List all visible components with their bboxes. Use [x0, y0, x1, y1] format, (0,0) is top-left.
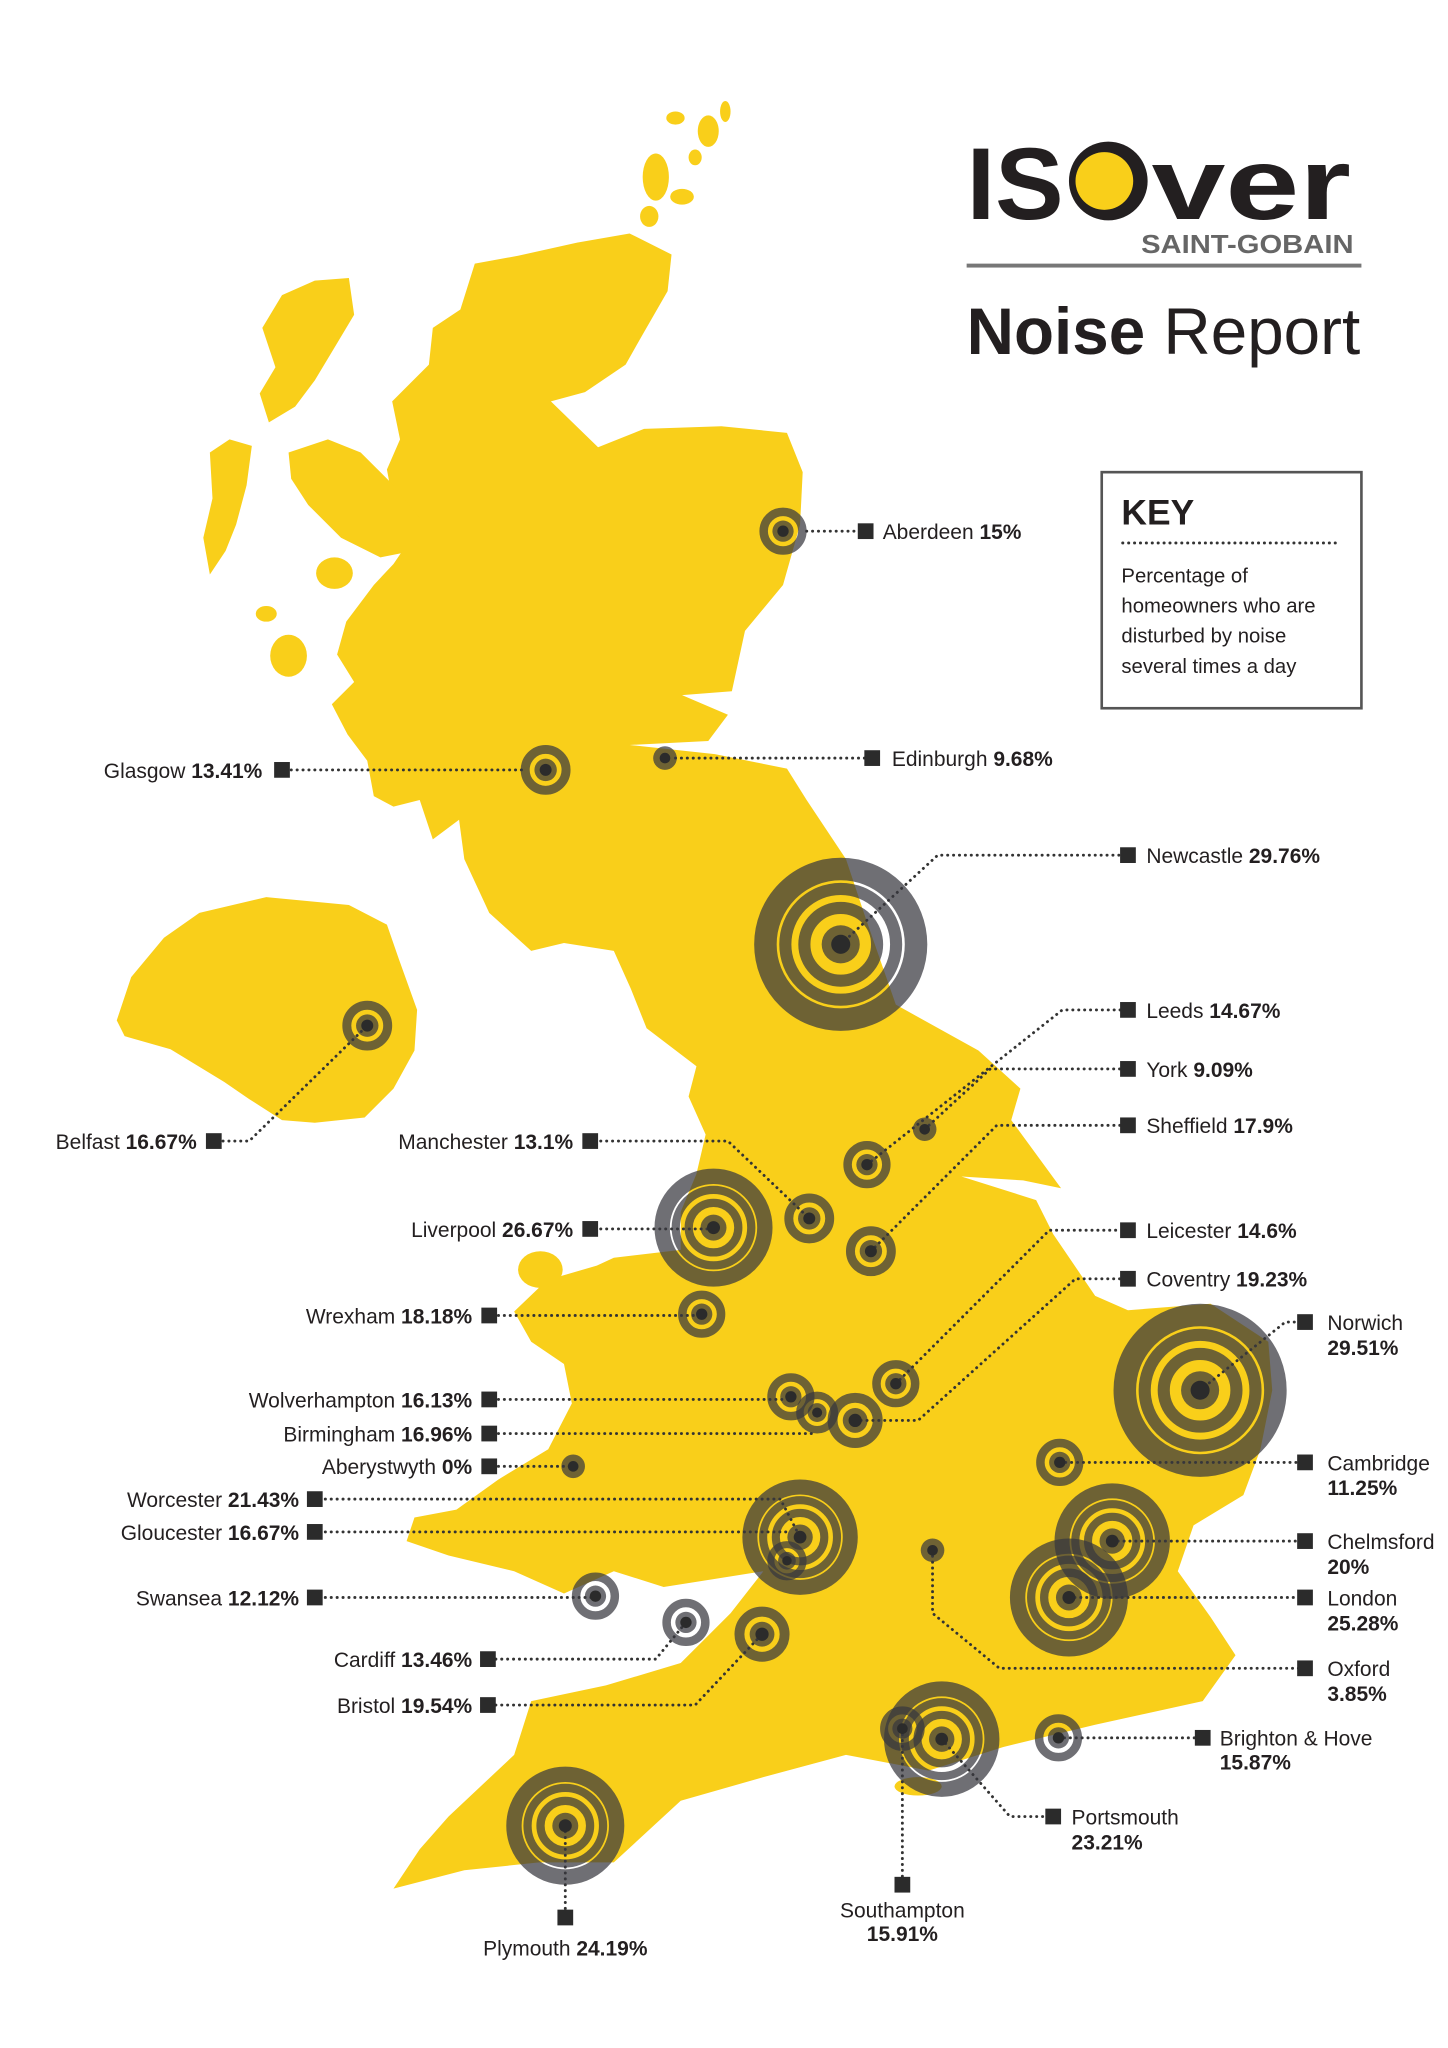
labels: right side: York 9.09%	[1146, 1059, 1253, 1082]
labels: left side: Bristol 19.54%	[337, 1695, 473, 1718]
key box: KEY	[1121, 493, 1195, 533]
labels: right side: Leicester 14.6%	[1146, 1220, 1297, 1243]
labels: right side: 29.51%	[1327, 1337, 1399, 1360]
labels: left side: Belfast 16.67%	[56, 1131, 197, 1154]
key box: disturbed by noise	[1121, 626, 1286, 648]
labels: right side: Southampton	[840, 1899, 965, 1922]
labels: right side: Edinburgh 9.68%	[892, 748, 1053, 771]
labels: right side: Portsmouth	[1072, 1806, 1179, 1829]
labels: right side: Cambridge	[1327, 1452, 1430, 1475]
labels: right side: Aberdeen 15%	[883, 521, 1022, 544]
map: UK	[117, 101, 1272, 1889]
labels: right side: 23.21%	[1072, 1831, 1143, 1854]
labels: left side: Glasgow 13.41%	[104, 760, 263, 783]
labels: right side: 15.91%	[867, 1923, 938, 1946]
key box: homeowners who are	[1121, 595, 1316, 617]
labels: right side: Newcastle 29.76%	[1146, 845, 1320, 868]
map: islands	[203, 101, 942, 1796]
labels: right side: 20%	[1327, 1556, 1370, 1579]
labels: right side: 15.87%	[1220, 1751, 1291, 1774]
logo: ISOVER: SAINT-GOBAIN	[1141, 229, 1354, 259]
key box: Percentage of	[1121, 565, 1248, 587]
labels: right side: Chelmsford	[1327, 1531, 1435, 1554]
labels: right side: Sheffield 17.9%	[1146, 1115, 1293, 1138]
labels: right side: 3.85%	[1327, 1683, 1387, 1706]
labels: left side: Birmingham 16.96%	[283, 1423, 473, 1446]
circles: noise markers	[347, 512, 1275, 1877]
labels: right side: Norwich	[1327, 1312, 1403, 1335]
leader lines	[223, 531, 1298, 1911]
labels: right side: Brighton & Hove	[1220, 1728, 1372, 1751]
labels: left side: Cardiff 13.46%	[334, 1649, 473, 1672]
key box: several times a day	[1121, 656, 1297, 678]
labels: right side: Oxford	[1327, 1658, 1390, 1681]
map: Great Britain	[332, 233, 1272, 1889]
logo: ISOVER: ver	[1152, 126, 1351, 241]
labels: left side: Gloucester 16.67%	[121, 1522, 299, 1545]
key box	[1102, 472, 1361, 708]
labels: right side: Coventry 19.23%	[1146, 1269, 1308, 1292]
labels: left side: Aberystwyth 0%	[322, 1456, 473, 1479]
labels: right side: 11.25%	[1327, 1477, 1398, 1500]
labels: right side: Plymouth 24.19%	[483, 1938, 648, 1961]
labels: right side: Leeds 14.67%	[1146, 1000, 1281, 1023]
labels: left side: Wolverhampton 16.13%	[249, 1389, 473, 1412]
logo: ISOVER	[967, 126, 1361, 268]
labels: left side: Manchester 13.1%	[398, 1131, 574, 1154]
labels: right side: 25.28%	[1327, 1612, 1399, 1635]
labels: left side	[56, 760, 598, 1718]
logo: ISOVER: IS	[967, 126, 1064, 241]
map: Northern Ireland	[117, 897, 417, 1123]
title: Noise Report: Noise Report	[967, 295, 1360, 368]
labels: right side: London	[1327, 1587, 1397, 1610]
labels: left side: Wrexham 18.18%	[306, 1305, 473, 1328]
labels: left side: Worcester 21.43%	[127, 1489, 299, 1512]
labels: left side: Liverpool 26.67%	[411, 1219, 574, 1242]
labels: left side: Swansea 12.12%	[136, 1587, 299, 1610]
labels: right side	[483, 521, 1435, 1961]
